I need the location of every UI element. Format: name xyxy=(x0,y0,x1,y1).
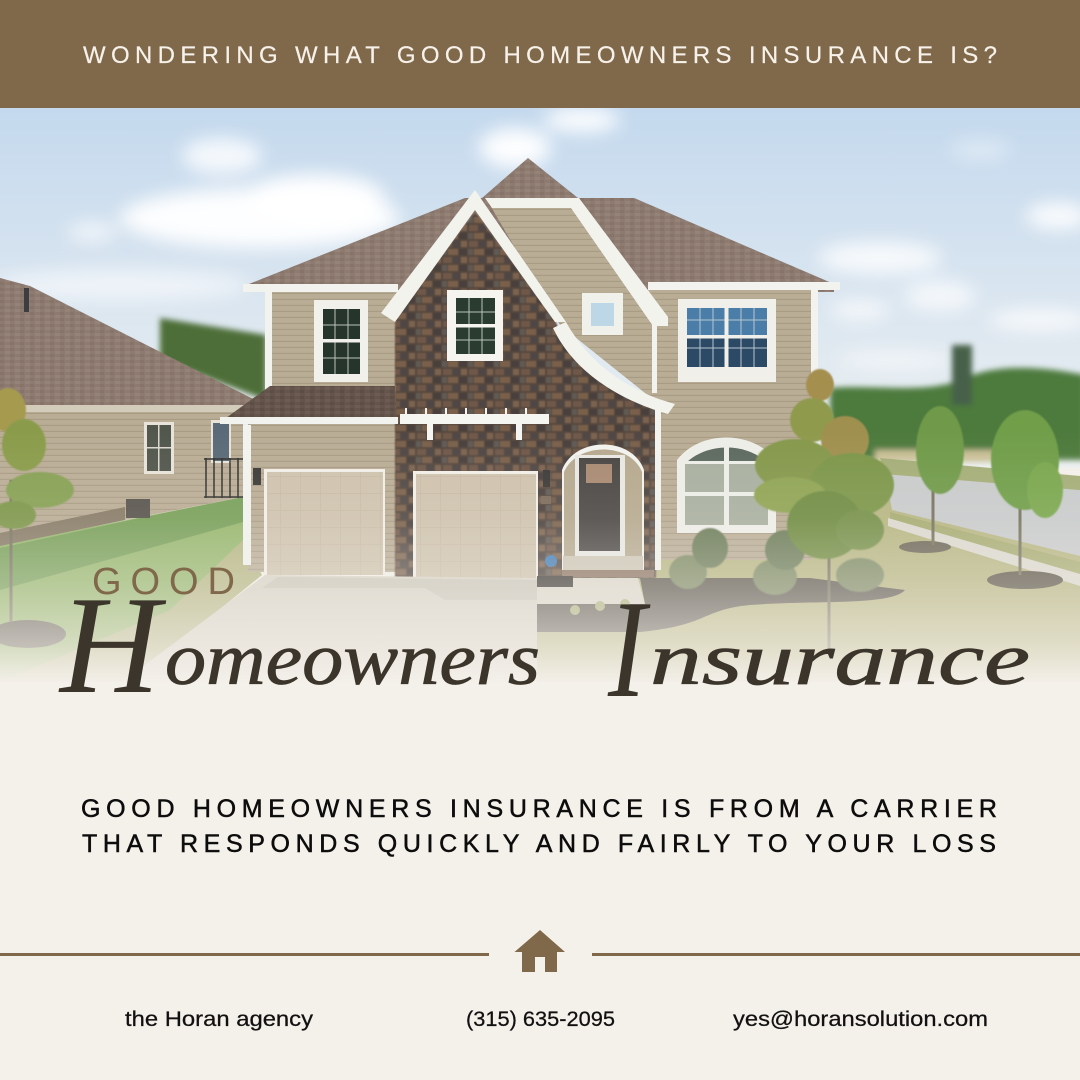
title: Homeowners Insurance script: omeowners xyxy=(165,619,540,701)
title: GOOD: GOOD xyxy=(92,561,235,603)
gable trim xyxy=(381,190,566,322)
title: Homeowners Insurance script: H xyxy=(58,568,167,723)
neighbouring house xyxy=(0,278,265,546)
title: Homeowners Insurance script: I xyxy=(607,572,651,727)
lower roof xyxy=(226,386,397,418)
lights and house number xyxy=(253,468,551,504)
garage door right xyxy=(413,471,538,580)
statement text: THAT RESPONDS QUICKLY AND FAIRLY TO YOUR LOSS xyxy=(82,830,996,858)
young trees xyxy=(0,369,1063,652)
top banner xyxy=(0,0,1080,108)
footer contact details xyxy=(125,1008,988,1031)
icon: house xyxy=(514,930,565,972)
window upper right xyxy=(678,299,776,382)
side trees foliage xyxy=(916,406,964,494)
pergola xyxy=(400,408,549,440)
siding walls xyxy=(270,290,400,390)
main roof xyxy=(249,198,834,292)
house xyxy=(220,158,840,580)
stone facade xyxy=(395,212,656,578)
email: yes@horansolution.com xyxy=(733,1008,988,1031)
window small xyxy=(582,293,623,335)
divider with house icon xyxy=(0,930,1080,972)
entry with door xyxy=(545,444,654,577)
statement text: GOOD HOMEOWNERS INSURANCE IS FROM A CARRIER xyxy=(81,795,997,823)
ground and lawn xyxy=(0,455,1080,682)
bottom fade into cream xyxy=(0,430,1080,684)
window upper left xyxy=(314,300,368,382)
banner heading: WONDERING WHAT GOOD HOMEOWNERS INSURANCE IS? xyxy=(83,42,997,69)
sky with clouds xyxy=(0,108,1080,468)
driveway and walkway xyxy=(122,575,645,682)
photo: house exterior xyxy=(0,108,1080,684)
agency name: the Horan agency xyxy=(125,1008,314,1031)
background trees xyxy=(160,318,1080,462)
eave trim xyxy=(243,282,840,570)
road and sidewalk xyxy=(880,458,1080,586)
main tree foliage xyxy=(806,369,834,401)
statement text xyxy=(81,795,997,858)
garage door left xyxy=(264,469,385,575)
title: Homeowners Insurance script: nsurance xyxy=(650,619,1030,701)
window centre xyxy=(447,290,503,361)
garden beds and shrubs xyxy=(0,528,1063,648)
arched window lower right xyxy=(677,438,776,533)
phone: (315) 635-2095 xyxy=(466,1008,615,1031)
